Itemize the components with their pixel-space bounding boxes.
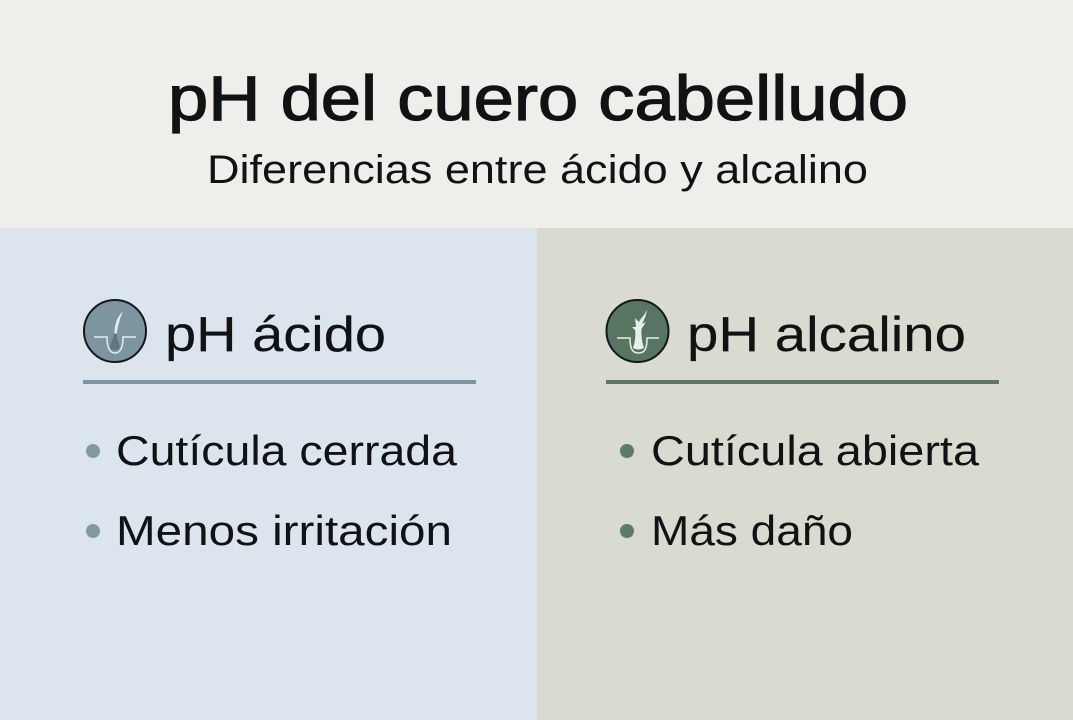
list item: Cutícula abierta: Cutícula abierta xyxy=(651,427,980,474)
title: pH del cuero cabelludo xyxy=(168,64,908,134)
list item: Menos irritación: Menos irritación xyxy=(116,507,452,554)
panel: pH alcalino xyxy=(537,228,1073,720)
heading: pH alcalino: pH alcalino xyxy=(687,308,966,362)
icon: damaged hair follicle xyxy=(606,300,668,362)
list item: Más daño: Más daño xyxy=(651,507,853,554)
list item: Cutícula cerrada: Cutícula cerrada xyxy=(116,427,458,474)
subtitle: Diferencias entre ácido y alcalino xyxy=(207,148,868,192)
divider: pH ácido xyxy=(83,380,476,384)
panel: pH ácido xyxy=(0,228,537,720)
divider: pH alcalino xyxy=(606,380,999,384)
icon: healthy hair follicle xyxy=(84,300,146,362)
heading: pH ácido: pH ácido xyxy=(165,308,386,362)
